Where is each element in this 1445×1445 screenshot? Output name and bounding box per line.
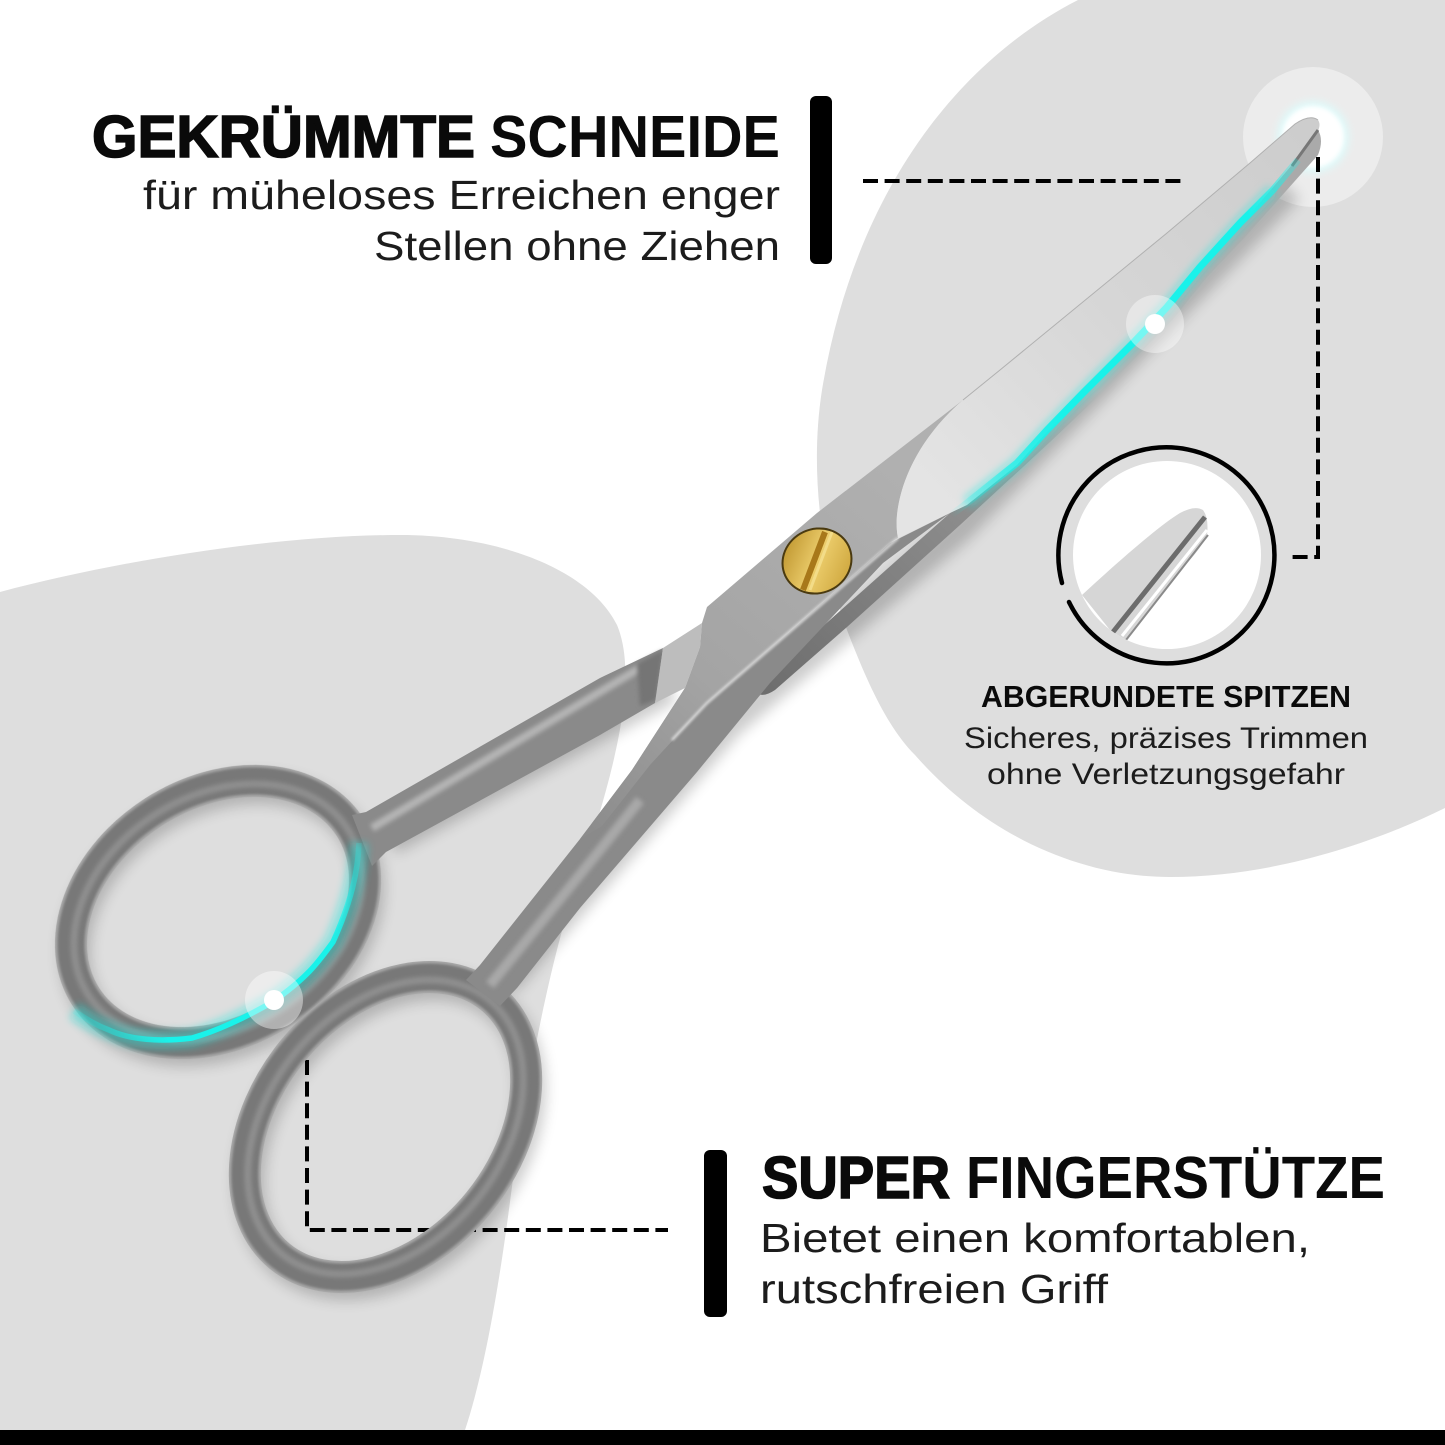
- heading: GEKRÜMMTE: [92, 104, 475, 170]
- scissors: [22, 118, 1321, 1340]
- callout: abgerundete spitzen: [964, 679, 1368, 791]
- glow dot: finger ring: [245, 971, 303, 1029]
- bottom black strip: [0, 1430, 1445, 1445]
- lower shaft: [466, 513, 950, 1006]
- blade tip dark groove: [1292, 130, 1318, 166]
- accent bar: bottom callout: [704, 1150, 727, 1317]
- heading: [92, 104, 780, 170]
- description: Stellen ohne Ziehen: [374, 223, 780, 269]
- scissors drop shadow: [26, 190, 1290, 1340]
- glow: blade tip: [1243, 67, 1383, 207]
- description: [143, 172, 780, 269]
- upper finger ring with cyan highlight: [22, 727, 414, 1097]
- heading: FINGERSTÜTZE: [966, 1145, 1385, 1211]
- description: für müheloses Erreichen enger: [143, 172, 780, 218]
- callout: gekrümmte schneide: [92, 104, 780, 269]
- dashed leader: rounded tip to detail circle: [1287, 157, 1318, 557]
- dashed leader: finger rest callout: [307, 1060, 668, 1230]
- heading: SCHNEIDE: [490, 104, 780, 170]
- lens outer ring: [1058, 447, 1274, 663]
- brass screw: [770, 516, 864, 606]
- pivot bevel highlight: [672, 538, 898, 740]
- description: Sicheres, präzises Trimmen: [964, 722, 1368, 755]
- cyan ring glow: [74, 843, 359, 1040]
- upper handle shaft: [352, 623, 702, 866]
- description: [760, 1215, 1310, 1312]
- back blade: [757, 130, 1321, 695]
- dashed leader: curved blade callout: [863, 179, 1181, 183]
- glow dot: blade edge: [1126, 295, 1184, 353]
- heading: ABGERUNDETE SPITZEN: [981, 679, 1351, 714]
- front blade top edge: [963, 118, 1318, 400]
- background blob: top right: [817, 0, 1445, 877]
- description: [964, 722, 1368, 791]
- lower finger ring: [187, 922, 584, 1332]
- description: Bietet einen komfortablen,: [760, 1215, 1310, 1261]
- heading: [762, 1145, 1385, 1211]
- lens background: [1073, 461, 1261, 649]
- callout: super fingerstütze: [760, 1145, 1385, 1312]
- cyan blade line: [950, 160, 1298, 516]
- description: rutschfreien Griff: [760, 1266, 1109, 1312]
- accent bar: top callout: [810, 96, 832, 264]
- cyan blade glow: [967, 190, 1273, 503]
- lens blade tip: [1082, 508, 1208, 640]
- detail circle: rounded tip: [1058, 447, 1274, 663]
- front blade: [897, 118, 1320, 538]
- cyan ring line: [74, 843, 359, 1040]
- heading: SUPER: [762, 1145, 950, 1211]
- description: ohne Verletzungsgefahr: [987, 758, 1345, 791]
- background blob: bottom left: [0, 535, 625, 1430]
- pivot plate: [580, 400, 963, 839]
